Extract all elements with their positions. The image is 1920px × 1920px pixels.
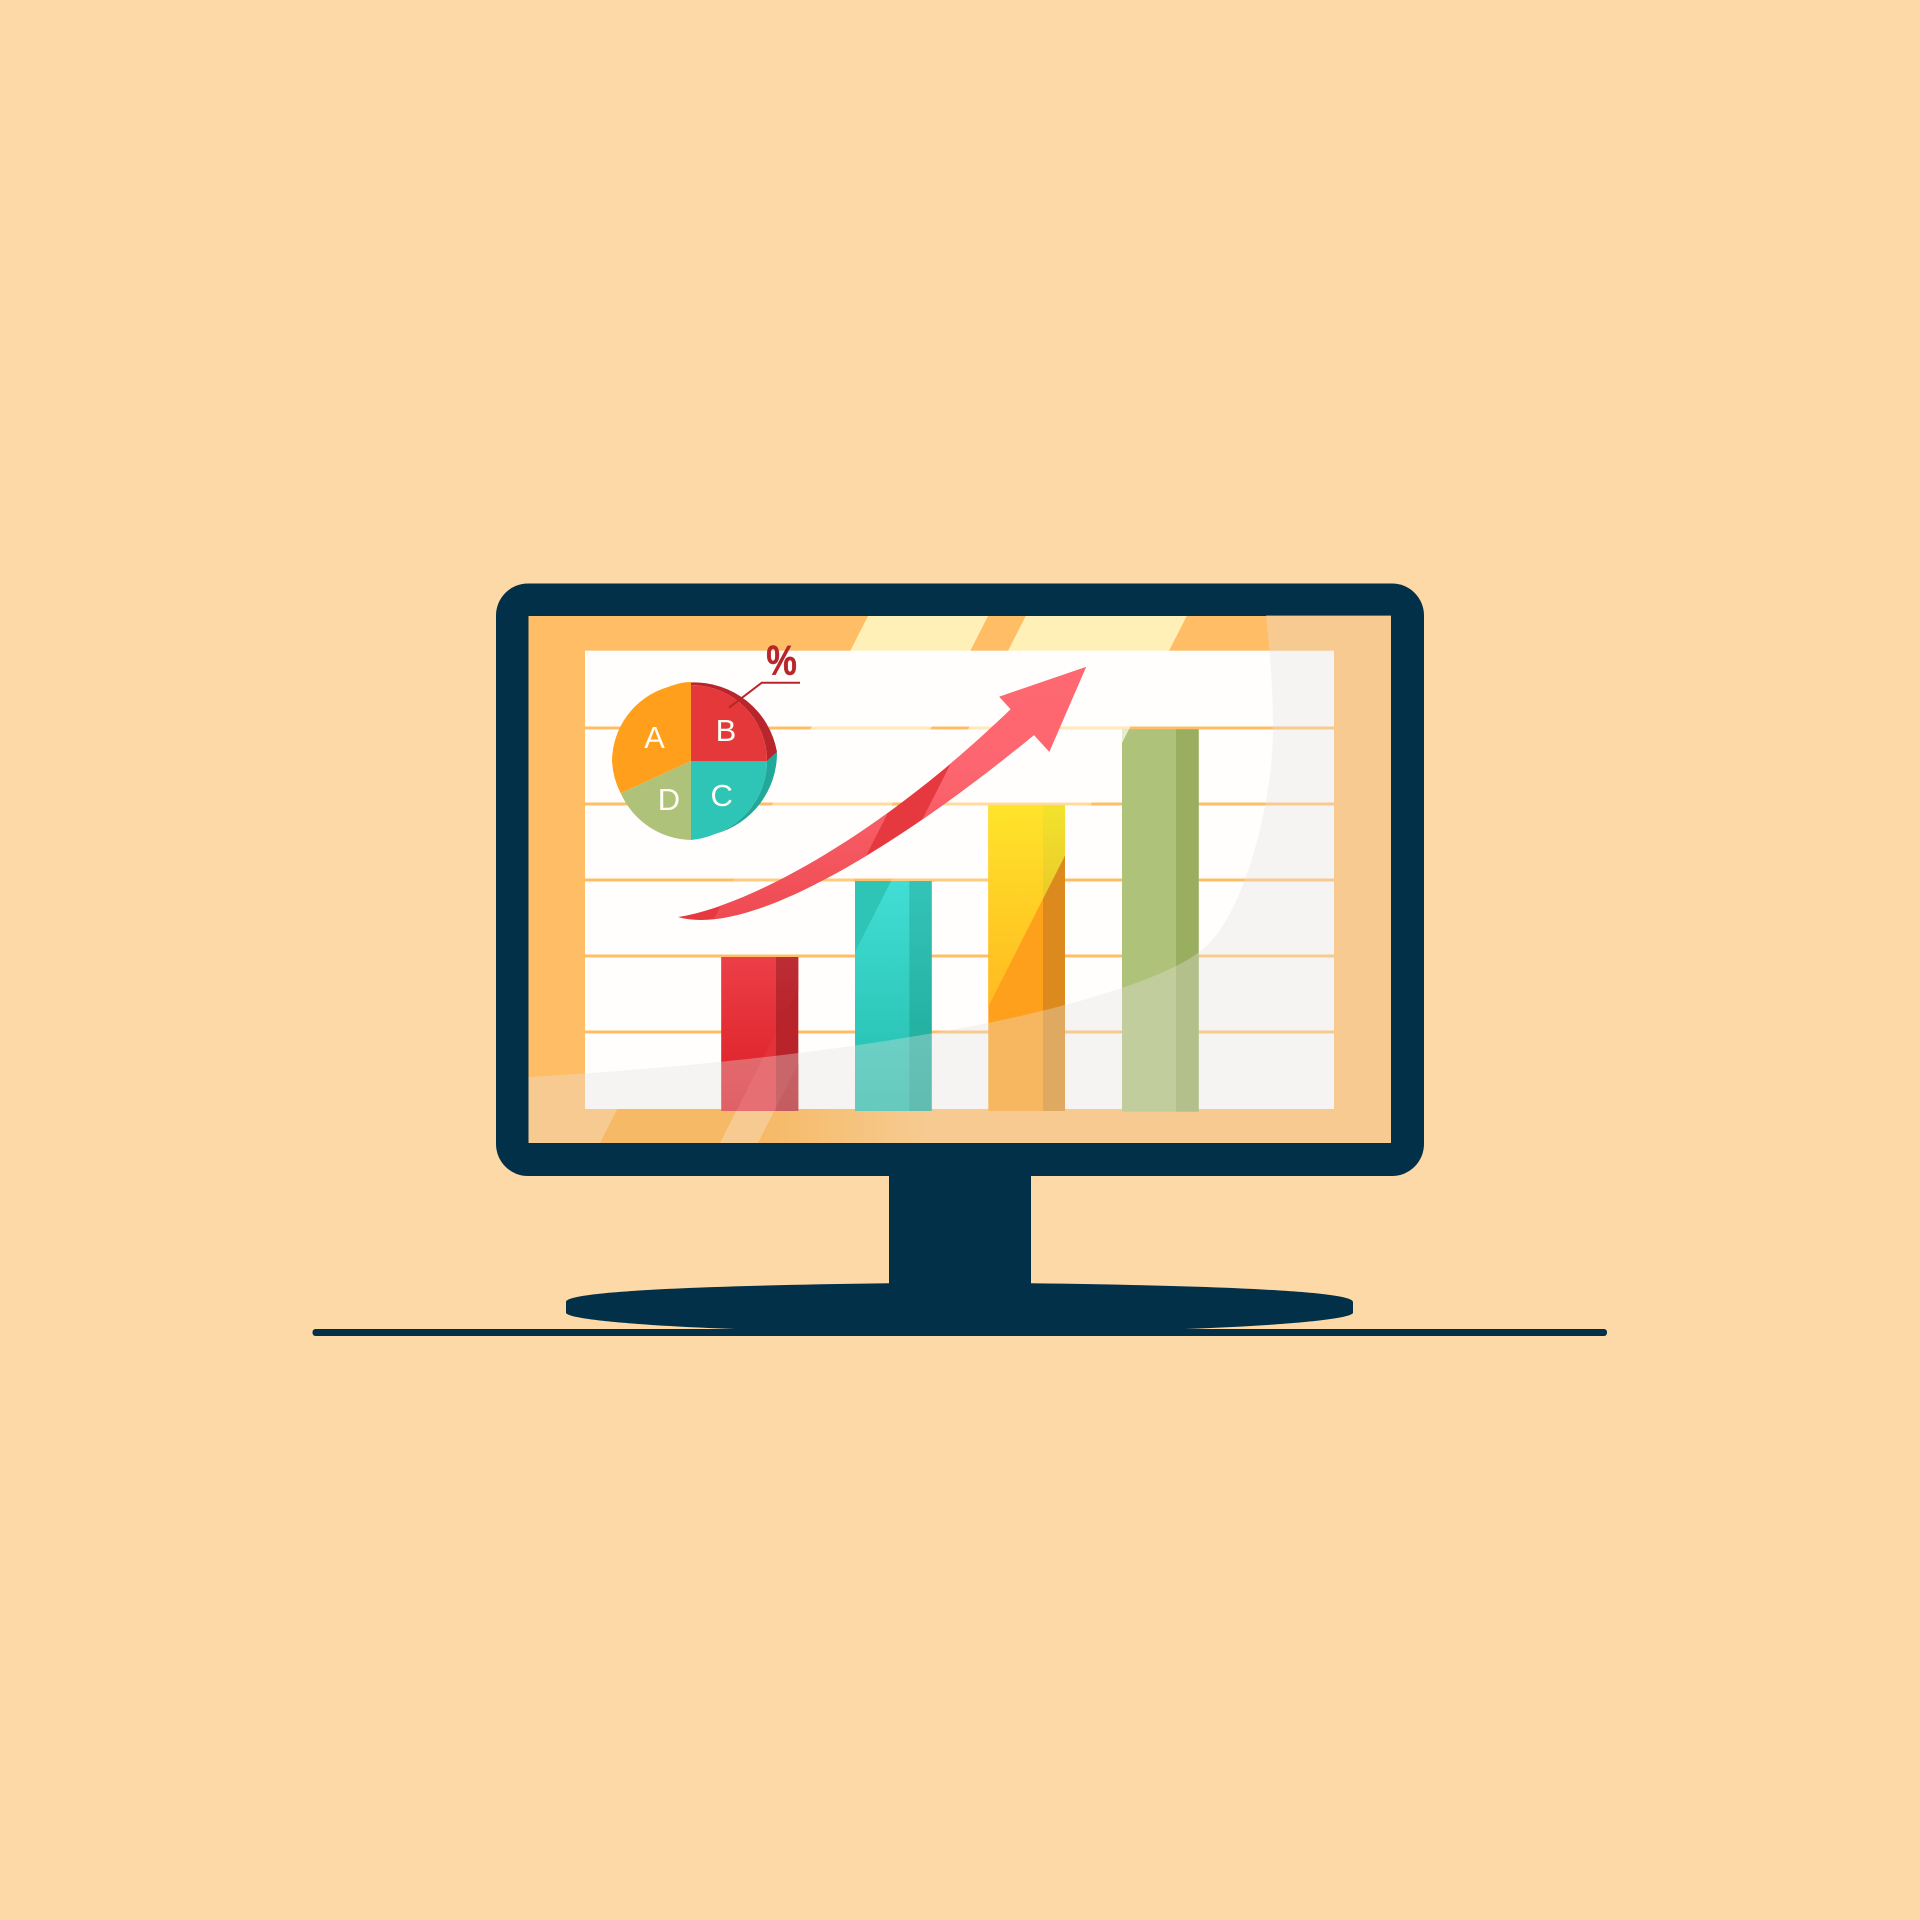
white chart panel (585, 651, 1334, 1109)
bar: red (721, 957, 798, 1111)
chart grid lines (585, 726, 1334, 1034)
pie slice C (691, 761, 767, 840)
label C: C (711, 778, 733, 813)
pie slice A (612, 682, 691, 793)
pie slice C shade (715, 752, 777, 834)
growth arrow (678, 667, 1086, 920)
percent sign: % (766, 637, 797, 684)
label B: B (716, 713, 736, 748)
screen glare overlay (528, 615, 1391, 1143)
screen background (528, 616, 1391, 1143)
label A: A (644, 720, 665, 755)
bar: yellow (988, 805, 1065, 1111)
bar: green (1122, 729, 1199, 1112)
pie slice B shade (691, 682, 777, 761)
monitor bezel (496, 584, 1424, 1176)
monitor screen (528, 615, 1391, 1143)
bar: teal (855, 881, 932, 1111)
leader line (729, 683, 800, 708)
diagonal light bands (600, 616, 1187, 1143)
pie slice D (621, 761, 691, 840)
pie slice B (691, 685, 767, 761)
ground line (312, 1329, 1607, 1336)
label D: D (658, 782, 680, 817)
pie chart (612, 637, 800, 840)
monitor stand and base (566, 1170, 1353, 1336)
